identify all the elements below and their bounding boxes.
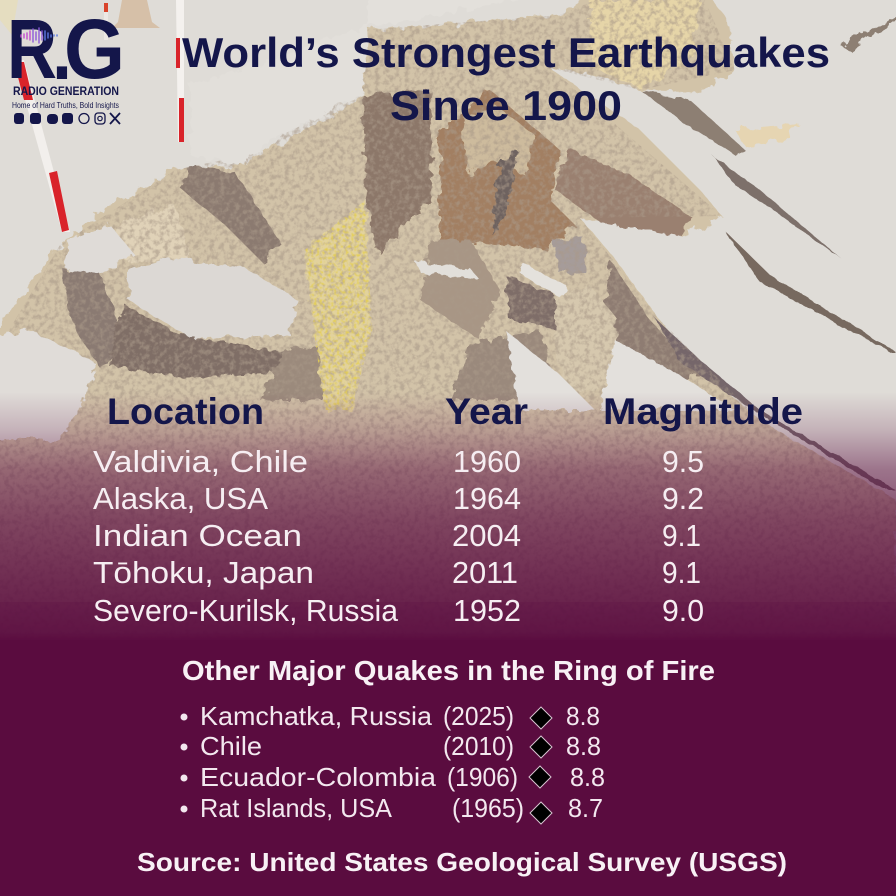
- item: Ecuador-Colombia: 8.8: [570, 762, 605, 792]
- row: Indian Ocean: 2004: [452, 518, 521, 553]
- item: Kamchatka: (2025): [443, 701, 514, 731]
- item: Chile: (2010): [443, 731, 514, 761]
- row: Tohoku: Tōhoku, Japan: [93, 555, 314, 590]
- dark band behind last row: [0, 602, 896, 640]
- title: Since 1900: [390, 82, 622, 129]
- item: Chile: [180, 731, 601, 761]
- gradient overlay to maroon: [0, 392, 896, 642]
- far pole: [104, 3, 108, 40]
- item: Kamchatka: [180, 701, 600, 731]
- row: Alaska: [93, 481, 704, 516]
- row: Alaska: 9.2: [662, 481, 704, 516]
- row: Tohoku: 2011: [452, 555, 518, 590]
- row: Severo-Kurilsk: Severo-Kurilsk, Russia: [93, 593, 399, 628]
- table header: Magnitude: [603, 391, 803, 432]
- row: Valdivia: [93, 444, 704, 479]
- row: Severo-Kurilsk: [93, 593, 704, 628]
- row: Tohoku: 9.1: [662, 555, 701, 590]
- logo mark R.G: R: [7, 2, 57, 96]
- brown pits: [363, 90, 432, 252]
- row: Valdivia: 9.5: [662, 444, 704, 479]
- logo: Radio Generation: [7, 2, 125, 124]
- item: Chile: 8.8: [566, 731, 601, 761]
- left pole: [14, 60, 70, 232]
- rubble grain: [0, 0, 896, 640]
- item: Rat Islands: 8.7: [568, 793, 603, 823]
- item: Ecuador-Colombia: [180, 762, 605, 792]
- item: Rat Islands: (1965): [452, 793, 524, 823]
- title: World’s Strongest Earthquakes: [182, 29, 830, 76]
- list: other major quakes: [180, 701, 605, 824]
- yellow speckle: [305, 200, 372, 410]
- item: Ecuador-Colombia: (1906): [447, 762, 518, 792]
- rubble lumps: [555, 285, 618, 395]
- right pole: [176, 0, 184, 142]
- row: Indian Ocean: 9.1: [662, 518, 701, 553]
- row: Alaska: 1964: [453, 481, 521, 516]
- logo waveform: [21, 28, 57, 43]
- row: Valdivia: Valdivia, Chile: [93, 444, 308, 479]
- logo mark R.G: .: [52, 3, 72, 97]
- table: strongest earthquakes: [93, 391, 803, 628]
- row: Indian Ocean: [93, 518, 701, 553]
- logo tagline: Home of Hard Truths, Bold Insights: [12, 101, 119, 110]
- row: Severo-Kurilsk: 1952: [453, 593, 521, 628]
- source line: Source: United States Geological Survey (USGS): [137, 847, 787, 877]
- title: [182, 29, 830, 129]
- row: Severo-Kurilsk: 9.0: [662, 593, 704, 628]
- traffic cone: [112, 0, 160, 28]
- heading: other major quakes: Other Major Quakes in the Ring of Fire: [182, 655, 715, 686]
- table header: [107, 391, 803, 432]
- item: Ecuador-Colombia: Ecuador-Colombia: [200, 762, 437, 792]
- row: Alaska: Alaska, USA: [93, 481, 268, 516]
- item: Chile: Chile: [200, 731, 262, 761]
- item: Kamchatka: Kamchatka, Russia: [200, 701, 433, 731]
- logo mark R.G: G: [64, 2, 125, 96]
- row: Valdivia: 1960: [453, 444, 521, 479]
- dark crack lines on right: [712, 155, 845, 262]
- social icons: [14, 113, 120, 124]
- item: Rat Islands: Rat Islands, USA: [200, 793, 393, 823]
- row: Tohoku: [93, 555, 701, 590]
- logo mark R.G: [7, 2, 125, 97]
- item: Rat Islands: [180, 793, 603, 824]
- yellow patch: [305, 200, 372, 410]
- logo name: RADIO GENERATION: [13, 86, 119, 98]
- solid maroon bottom panel: [0, 640, 896, 896]
- item: Kamchatka: 8.8: [566, 701, 600, 731]
- table header: Year: [445, 391, 528, 432]
- row: Indian Ocean: Indian Ocean: [93, 518, 302, 553]
- road slabs: [128, 258, 298, 338]
- table header: Location: [107, 391, 264, 432]
